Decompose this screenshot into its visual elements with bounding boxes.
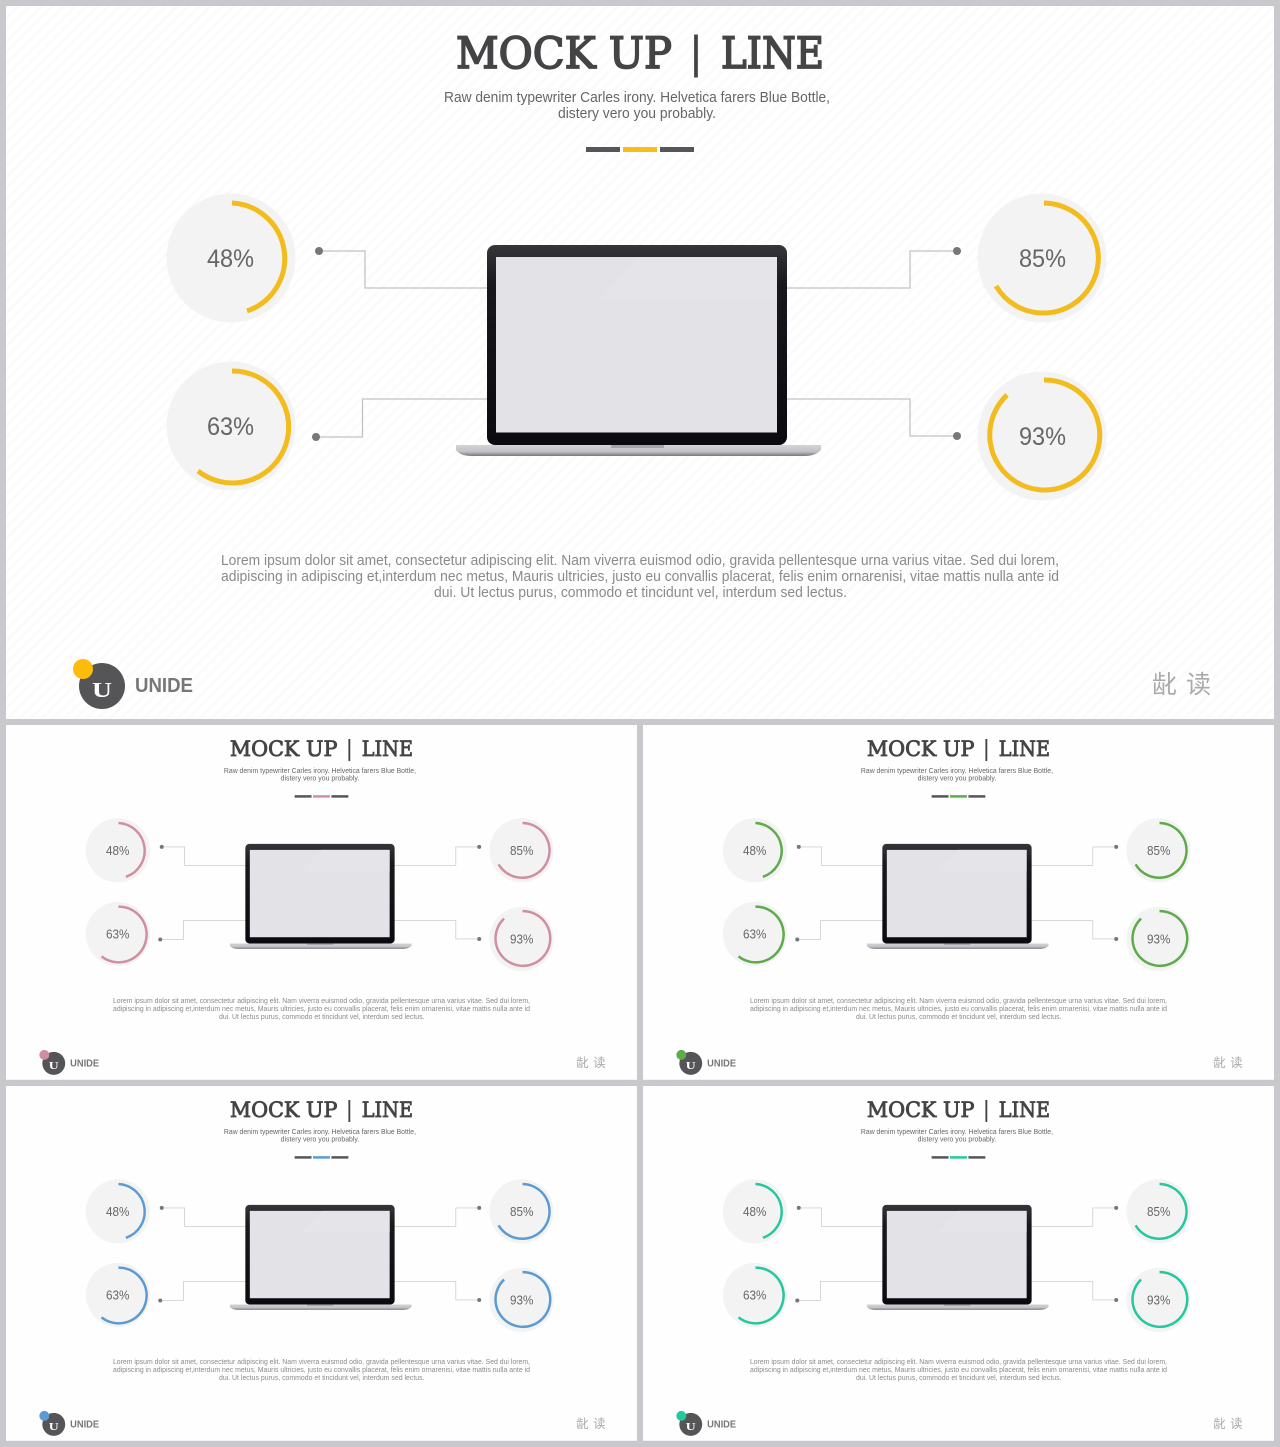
gauge 48% xyxy=(86,1179,150,1243)
body text: dui. Ut lectus purus, commodo et tincidunt vel, interdum sed lectus. xyxy=(219,1373,424,1382)
body text xyxy=(113,996,530,1021)
logo xyxy=(676,1050,736,1075)
gauge 93% xyxy=(1126,907,1191,971)
connector 63% xyxy=(795,1282,882,1302)
subtitle: Raw denim typewriter Carles irony. Helvetica farers Blue Bottle, xyxy=(444,90,830,106)
logo: UNIDE xyxy=(707,1419,736,1430)
gauge 48% xyxy=(723,1179,787,1243)
logo: U xyxy=(686,1061,696,1072)
gauge 85% xyxy=(1126,1179,1191,1243)
gauge 63% xyxy=(166,362,296,490)
connector 93% xyxy=(1032,921,1118,941)
logo: UNIDE xyxy=(135,675,193,697)
gauge 85%: 85% xyxy=(510,844,533,858)
panel: blue slide xyxy=(6,1086,637,1441)
gauge 93% xyxy=(489,907,554,971)
gauge 85% xyxy=(978,194,1106,322)
connector 93% xyxy=(1032,1282,1118,1302)
title: MOCK UP xyxy=(867,737,974,762)
divider bars xyxy=(295,1156,348,1159)
connector 93% xyxy=(395,1282,481,1302)
chinese mark: 龀 读 xyxy=(576,1417,606,1431)
laptop xyxy=(867,844,1049,949)
body text: adipiscing in adipiscing et,interdum nec metus, Mauris ultricies, justo eu convallis placerat, felis enim ornarenisi, vitae mattis nulla ante id xyxy=(113,1365,530,1374)
divider bars xyxy=(586,147,694,152)
body text: Lorem ipsum dolor sit amet, consectetur adipiscing elit. Nam viverra euismod odio, gravida pellentesque urna varius vitae. Sed dui lorem, xyxy=(221,553,1059,569)
divider bars xyxy=(932,1156,985,1159)
connector 85% xyxy=(395,1206,481,1226)
subtitle xyxy=(224,766,416,783)
connector 48% xyxy=(160,1206,245,1226)
title: | xyxy=(983,735,989,761)
subtitle: distery vero you probably. xyxy=(918,774,996,783)
gauge 63%: 63% xyxy=(106,927,129,941)
title: MOCK UP xyxy=(456,29,672,79)
gauge 63% xyxy=(86,1263,150,1327)
gauge 48%: 48% xyxy=(207,245,254,273)
logo: U xyxy=(686,1422,696,1433)
body text: adipiscing in adipiscing et,interdum nec metus, Mauris ultricies, justo eu convallis placerat, felis enim ornarenisi, vitae mattis nulla ante id xyxy=(750,1004,1167,1013)
gauge 85% xyxy=(1126,818,1191,882)
logo xyxy=(73,659,193,709)
title xyxy=(230,1096,413,1123)
logo: UNIDE xyxy=(70,1058,99,1069)
connector 48% xyxy=(315,247,487,288)
gauge 85%: 85% xyxy=(1147,844,1170,858)
title: MOCK UP xyxy=(230,1098,337,1123)
gauge 93%: 93% xyxy=(1147,1293,1170,1307)
subtitle xyxy=(861,766,1053,783)
subtitle: distery vero you probably. xyxy=(281,1135,359,1144)
gauge 93% xyxy=(1126,1268,1191,1332)
gauge 93%: 93% xyxy=(510,932,533,946)
chinese mark: 龀 读 xyxy=(576,1056,606,1070)
title: | xyxy=(346,735,352,761)
connector 85% xyxy=(787,247,961,288)
body text: dui. Ut lectus purus, commodo et tincidunt vel, interdum sed lectus. xyxy=(856,1012,1061,1021)
body text: adipiscing in adipiscing et,interdum nec metus, Mauris ultricies, justo eu convallis placerat, felis enim ornarenisi, vitae mattis nulla ante id xyxy=(113,1004,530,1013)
gauge 48% xyxy=(723,818,787,882)
gauge 85%: 85% xyxy=(1019,245,1066,273)
divider bars xyxy=(932,795,985,798)
title xyxy=(867,735,1050,762)
gauge 93% xyxy=(978,372,1106,500)
body text: Lorem ipsum dolor sit amet, consectetur adipiscing elit. Nam viverra euismod odio, gravida pellentesque urna varius vitae. Sed dui lorem, xyxy=(113,1357,530,1366)
subtitle: Raw denim typewriter Carles irony. Helvetica farers Blue Bottle, xyxy=(861,1127,1053,1136)
subtitle: Raw denim typewriter Carles irony. Helvetica farers Blue Bottle, xyxy=(224,1127,416,1136)
gauge 63% xyxy=(723,1263,787,1327)
body text xyxy=(750,996,1167,1021)
title xyxy=(867,1096,1050,1123)
gauge 48%: 48% xyxy=(743,1205,766,1219)
title: MOCK UP xyxy=(867,1098,974,1123)
title xyxy=(456,26,824,79)
chinese mark: 龀 读 xyxy=(1152,671,1211,699)
logo: U xyxy=(49,1061,59,1072)
title xyxy=(230,735,413,762)
logo: U xyxy=(92,678,112,702)
panel: teal slide xyxy=(643,1086,1274,1441)
subtitle: distery vero you probably. xyxy=(918,1135,996,1144)
gauge 63%: 63% xyxy=(743,1288,766,1302)
divider bars xyxy=(295,795,348,798)
connector 63% xyxy=(312,399,487,441)
logo: U xyxy=(49,1422,59,1433)
connector 85% xyxy=(395,845,481,865)
panel: pink slide xyxy=(6,725,637,1080)
gauge 93%: 93% xyxy=(510,1293,533,1307)
body text: adipiscing in adipiscing et,interdum nec metus, Mauris ultricies, justo eu convallis placerat, felis enim ornarenisi, vitae mattis nulla ante id xyxy=(750,1365,1167,1374)
connector 63% xyxy=(158,1282,245,1302)
connector 93% xyxy=(787,399,961,440)
body text xyxy=(113,1357,530,1382)
subtitle xyxy=(861,1127,1053,1144)
logo xyxy=(39,1411,99,1436)
body text: Lorem ipsum dolor sit amet, consectetur adipiscing elit. Nam viverra euismod odio, gravida pellentesque urna varius vitae. Sed dui lorem, xyxy=(750,1357,1167,1366)
laptop xyxy=(456,245,821,456)
subtitle xyxy=(224,1127,416,1144)
subtitle xyxy=(444,90,830,122)
gauge 63% xyxy=(723,902,787,966)
title: | xyxy=(346,1096,352,1122)
body text: dui. Ut lectus purus, commodo et tincidunt vel, interdum sed lectus. xyxy=(434,585,847,601)
panel: main yellow slide xyxy=(6,6,1274,719)
panel: green slide xyxy=(643,725,1274,1080)
body text xyxy=(750,1357,1167,1382)
title: LINE xyxy=(999,737,1050,762)
title: LINE xyxy=(721,29,824,79)
title: MOCK UP xyxy=(230,737,337,762)
title: LINE xyxy=(999,1098,1050,1123)
body text xyxy=(221,553,1059,601)
gauge 85% xyxy=(489,1179,554,1243)
body text: dui. Ut lectus purus, commodo et tincidunt vel, interdum sed lectus. xyxy=(856,1373,1061,1382)
body text: Lorem ipsum dolor sit amet, consectetur adipiscing elit. Nam viverra euismod odio, gravida pellentesque urna varius vitae. Sed dui lorem, xyxy=(113,996,530,1005)
connector 85% xyxy=(1032,845,1118,865)
body text: dui. Ut lectus purus, commodo et tincidunt vel, interdum sed lectus. xyxy=(219,1012,424,1021)
gauge 48%: 48% xyxy=(743,844,766,858)
logo: UNIDE xyxy=(707,1058,736,1069)
gauge 63% xyxy=(86,902,150,966)
gauge 48%: 48% xyxy=(106,1205,129,1219)
body text: adipiscing in adipiscing et,interdum nec metus, Mauris ultricies, justo eu convallis placerat, felis enim ornarenisi, vitae mattis nulla ante id xyxy=(221,569,1059,585)
subtitle: distery vero you probably. xyxy=(558,106,716,122)
title: | xyxy=(690,26,702,78)
title: | xyxy=(983,1096,989,1122)
gauge 48% xyxy=(86,818,150,882)
gauge 48%: 48% xyxy=(106,844,129,858)
laptop xyxy=(230,844,412,949)
gauge 85%: 85% xyxy=(1147,1205,1170,1219)
title: LINE xyxy=(362,737,413,762)
connector 63% xyxy=(158,921,245,941)
chinese mark: 龀 读 xyxy=(1213,1056,1243,1070)
gauge 63%: 63% xyxy=(106,1288,129,1302)
chinese mark: 龀 读 xyxy=(1213,1417,1243,1431)
connector 48% xyxy=(160,845,245,865)
gauge 85% xyxy=(489,818,554,882)
connector 48% xyxy=(797,845,882,865)
laptop xyxy=(867,1205,1049,1310)
gauge 48% xyxy=(166,194,296,322)
gauge 63%: 63% xyxy=(207,413,254,441)
gauge 93% xyxy=(489,1268,554,1332)
logo xyxy=(39,1050,99,1075)
title: LINE xyxy=(362,1098,413,1123)
subtitle: distery vero you probably. xyxy=(281,774,359,783)
subtitle: Raw denim typewriter Carles irony. Helvetica farers Blue Bottle, xyxy=(861,766,1053,775)
connector 48% xyxy=(797,1206,882,1226)
gauge 85%: 85% xyxy=(510,1205,533,1219)
connector 93% xyxy=(395,921,481,941)
logo xyxy=(676,1411,736,1436)
gauge 63%: 63% xyxy=(743,927,766,941)
laptop xyxy=(230,1205,412,1310)
body text: Lorem ipsum dolor sit amet, consectetur adipiscing elit. Nam viverra euismod odio, gravida pellentesque urna varius vitae. Sed dui lorem, xyxy=(750,996,1167,1005)
subtitle: Raw denim typewriter Carles irony. Helvetica farers Blue Bottle, xyxy=(224,766,416,775)
connector 63% xyxy=(795,921,882,941)
gauge 93%: 93% xyxy=(1019,423,1066,451)
connector 85% xyxy=(1032,1206,1118,1226)
logo: UNIDE xyxy=(70,1419,99,1430)
gauge 93%: 93% xyxy=(1147,932,1170,946)
